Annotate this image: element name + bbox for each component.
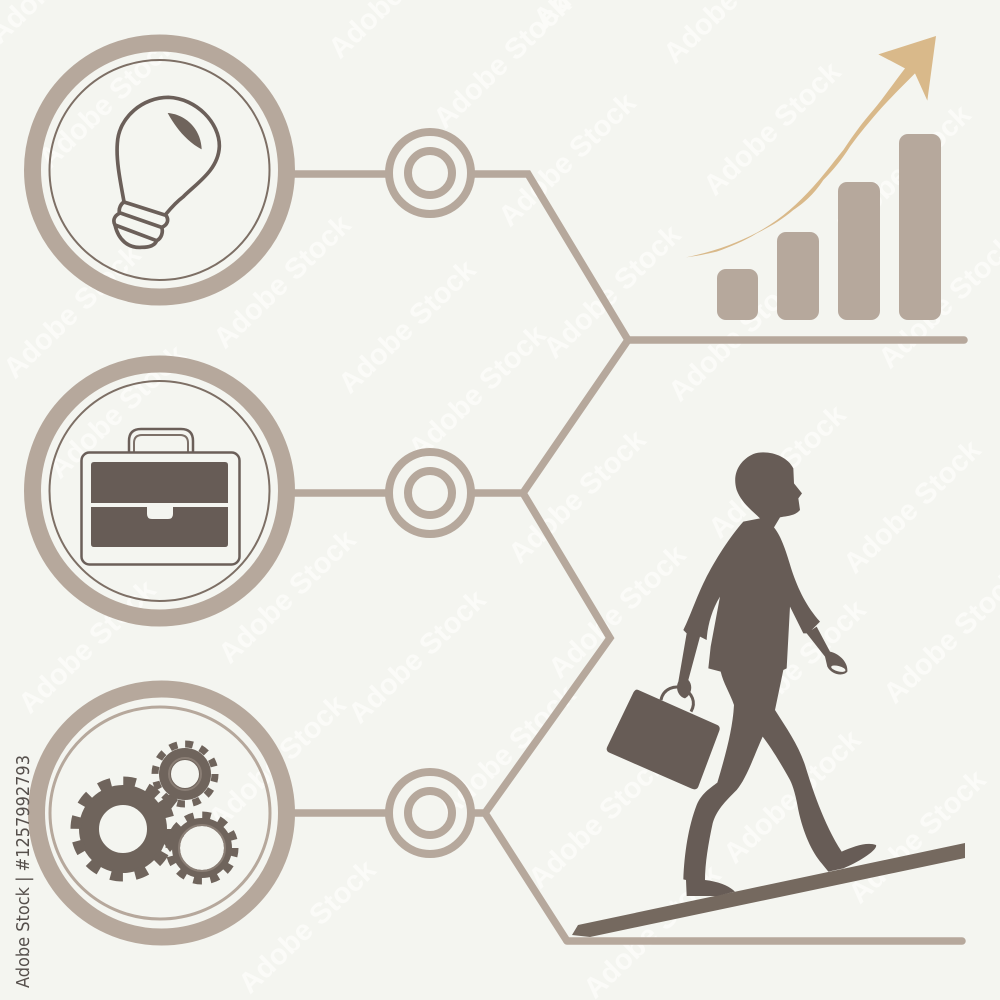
watermark pattern: Adobe Stock xyxy=(723,593,873,740)
node ring: middle xyxy=(389,452,471,534)
ramp xyxy=(572,843,965,937)
watermark pattern: Adobe Stock xyxy=(33,28,183,175)
watermark pattern: Adobe Stock xyxy=(43,338,193,485)
watermark pattern: Adobe Stock xyxy=(0,238,148,385)
watermark pattern: Adobe Stock xyxy=(208,208,358,355)
watermark pattern: Adobe Stock xyxy=(493,86,643,233)
panel: briefcase circle xyxy=(32,364,286,618)
node ring: bottom xyxy=(389,772,471,854)
watermark pattern: Adobe Stock xyxy=(663,261,813,408)
briefcase silhouette xyxy=(607,687,720,789)
watermark pattern: Adobe Stock xyxy=(433,678,583,825)
watermark pattern: Adobe Stock xyxy=(203,688,353,835)
watermark pattern: Adobe Stock xyxy=(843,763,993,910)
watermark pattern: Adobe Stock xyxy=(403,318,553,465)
watermark pattern: Adobe Stock xyxy=(523,748,673,895)
watermark pattern: Adobe Stock xyxy=(213,523,363,670)
icon: lightbulb xyxy=(114,97,219,247)
hand highlight xyxy=(831,664,846,673)
watermark pattern: Adobe Stock xyxy=(13,573,163,720)
icon: gears xyxy=(76,744,235,881)
connector lines xyxy=(293,174,964,941)
arrow: growth trend xyxy=(686,36,936,257)
watermark pattern: Adobe Stock xyxy=(838,433,988,580)
figure: walking businessman with briefcase xyxy=(607,452,876,896)
node ring: top xyxy=(389,132,471,214)
watermark pattern: Adobe Stock xyxy=(503,423,653,570)
watermark pattern: Adobe Stock xyxy=(233,853,383,1000)
person silhouette xyxy=(677,452,876,896)
watermark pattern: Adobe Stock xyxy=(538,218,688,365)
bar chart with rising arrow xyxy=(686,36,941,320)
watermark pattern: Adobe Stock xyxy=(828,98,978,245)
panel: gears circle xyxy=(36,689,286,937)
icon: briefcase xyxy=(82,429,240,564)
watermark pattern: Adobe Stock xyxy=(698,55,848,202)
watermark pattern: Adobe Stock xyxy=(703,398,853,545)
watermark pattern: Adobe Stock xyxy=(343,583,493,730)
watermark pattern: Adobe Stock xyxy=(718,723,868,870)
watermark id text: Adobe Stock | #1257992793 xyxy=(13,755,34,988)
watermark pattern: Adobe Stock xyxy=(543,538,693,685)
panel: idea lightbulb circle xyxy=(32,43,286,297)
watermark pattern: Adobe Stock xyxy=(333,253,483,400)
